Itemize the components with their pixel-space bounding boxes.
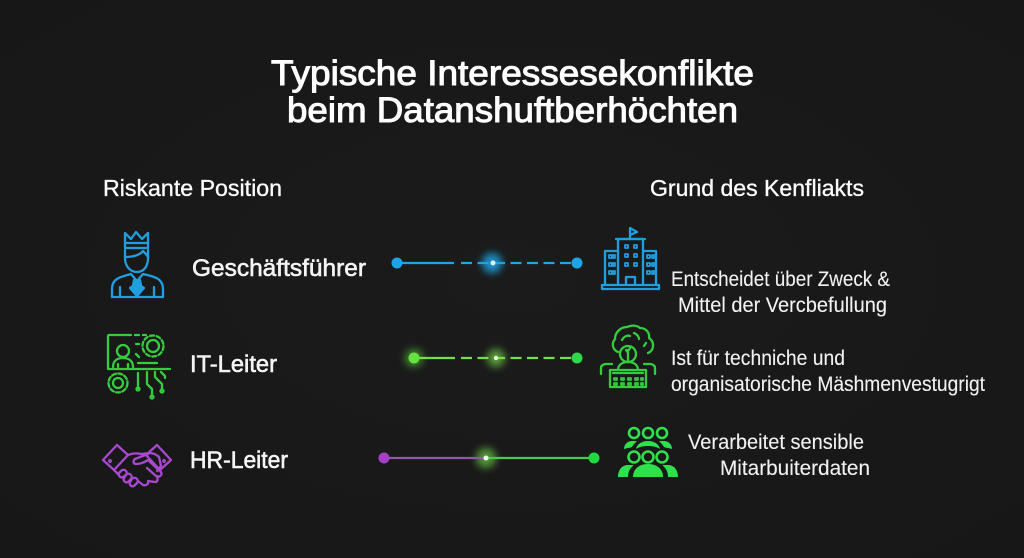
title: beim Datanshuftberhöchten [287,91,738,130]
text: reason 2: organisatorische Mäshmenvestugrigt [671,373,985,396]
connector: green [405,349,582,367]
title [271,54,754,130]
heading: Grund des Konflikts: Grund des Kenfliakts [650,175,864,201]
text: reason 1 [671,268,890,317]
connector: purple to green [378,448,600,468]
label: IT-Leiter: IT-Leiter [190,351,277,378]
label: Geschäftsführer: Geschäftsführer [192,255,366,282]
text: reason 3 [688,431,870,480]
icon: executive with crown [112,232,163,297]
text: reason 1: Entscheidet über Zweck & [671,268,890,291]
icon: office building [602,228,659,289]
text: reason 2: Ist für techniche und [671,347,845,370]
title: Typische Interessesekonflikte [271,54,754,93]
icon: IT admin with gears [108,335,170,398]
text: reason 3: Mitarbuiterdaten [720,457,870,480]
icon: handshake [103,445,171,486]
icon: tree on building [601,326,655,387]
text: reason 1: Mittel der Vercbefullung [678,294,887,317]
label: HR-Leiter: HR-Leiter [190,447,288,474]
icon: group of people [618,428,678,477]
text: reason 2 [671,347,985,396]
connector: blue [392,253,582,273]
text: reason 3: Verarbeitet sensible [688,431,864,454]
heading: Riskante Position: Riskante Position [103,175,282,201]
